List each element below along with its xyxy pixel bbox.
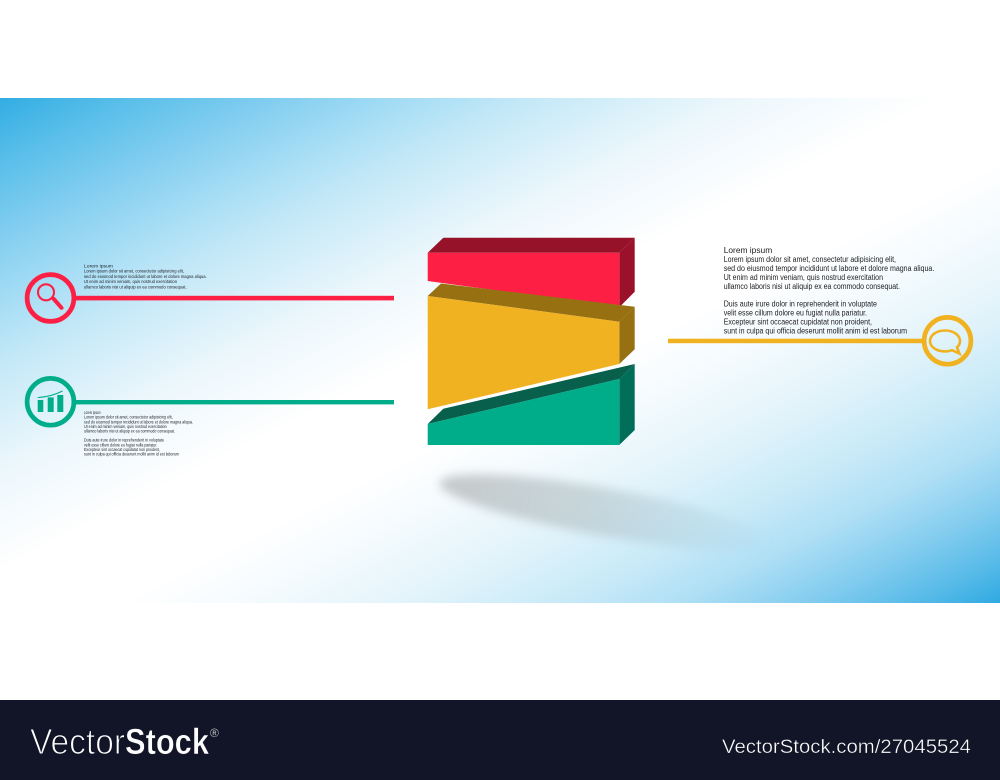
connector line: yellow xyxy=(668,339,924,343)
text block: green callout: Duis aute irure dolor in reprehenderit in voluptate xyxy=(84,438,164,443)
text block: green callout: Excepteur sint occaecat cupidatat non proident, xyxy=(84,447,160,452)
text block: yellow callout: Ut enim ad minim veniam, quis nostrud exercitation xyxy=(724,273,883,282)
text block: yellow callout: velit esse cillum dolore eu fugiat nulla pariatur. xyxy=(724,309,867,318)
text block: green callout: ullamco laboris nisi ut aliquip ex ea commodo consequat. xyxy=(84,429,175,434)
shadow under block xyxy=(435,459,775,565)
text block: green callout: sed do eiusmod tempor incididunt ut labore et dolore magna aliqua. xyxy=(84,419,193,424)
text block: red callout: sed do eiusmod tempor incididunt ut labore et dolore magna aliqua. xyxy=(84,274,207,280)
icon: speech bubble xyxy=(924,317,971,364)
green segment xyxy=(428,364,635,445)
yellow segment xyxy=(428,284,635,409)
icon: magnifier xyxy=(27,275,74,321)
text block: red callout: Lorem ipsum xyxy=(84,264,113,270)
text block: yellow callout: sunt in culpa qui officia deserunt mollit anim id est laborum xyxy=(724,327,907,336)
text block: yellow callout: Lorem ipsum dolor sit amet, consectetur adipisicing elit, xyxy=(724,255,896,264)
text block: red callout xyxy=(84,264,207,290)
text block: green callout: Lorem ipsum dolor sit amet, consectetur adipisicing elit, xyxy=(84,415,173,420)
text block: green callout xyxy=(84,410,193,457)
text block: red callout: ullamco laboris nisi ut aliquip ex ea commodo consequat. xyxy=(84,284,187,290)
icon: bar chart xyxy=(27,378,74,425)
text block: yellow callout: ullamco laboris nisi ut aliquip ex ea commodo consequat. xyxy=(724,282,900,291)
logo wordmark: Stock xyxy=(125,721,210,762)
text block: yellow callout: sed do eiusmod tempor incididunt ut labore et dolore magna aliqua. xyxy=(724,264,934,273)
logo wordmark: ® xyxy=(210,726,219,740)
connector line: green xyxy=(74,400,394,404)
text block: yellow callout: Duis aute irure dolor in reprehenderit in voluptate xyxy=(724,300,877,309)
callout: red magnifier xyxy=(27,264,394,321)
connector line: red xyxy=(74,296,394,300)
background panel xyxy=(0,98,1000,603)
text block: yellow callout xyxy=(724,245,934,336)
logo wordmark xyxy=(30,721,219,762)
logo wordmark: Vector xyxy=(30,721,125,762)
text block: green callout: velit esse cillum dolore eu fugiat nulla pariatur. xyxy=(84,442,157,447)
footer bar xyxy=(0,700,1000,780)
text block: green callout: Lorem ipsum xyxy=(84,410,101,415)
callout: yellow speech bubble xyxy=(668,245,971,364)
callout: green chart xyxy=(27,378,394,457)
3D block diagram xyxy=(428,238,635,445)
text block: red callout: Ut enim ad minim veniam, quis nostrud exercitation xyxy=(84,279,177,285)
image id: VectorStock.com/27045524 xyxy=(722,737,971,758)
text block: yellow callout: Lorem ipsum xyxy=(724,245,772,255)
red segment xyxy=(428,238,635,307)
text block: red callout: Lorem ipsum dolor sit amet, consectetur adipisicing elit, xyxy=(84,269,184,275)
text block: green callout: sunt in culpa qui officia deserunt mollit anim id est laborum xyxy=(84,452,179,457)
text block: yellow callout: Excepteur sint occaecat cupidatat non proident, xyxy=(724,318,872,327)
text block: green callout: Ut enim ad minim veniam, quis nostrud exercitation xyxy=(84,424,167,429)
